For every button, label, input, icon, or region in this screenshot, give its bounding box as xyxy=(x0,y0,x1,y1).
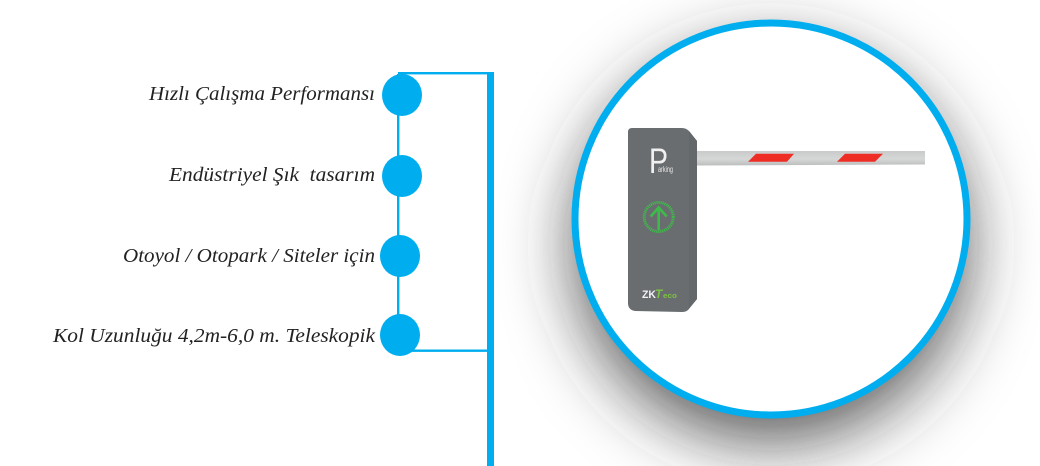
barrier arm xyxy=(697,151,925,166)
ZKTeco logo: eco xyxy=(663,293,677,300)
circle shadow xyxy=(576,50,966,440)
feature 3 xyxy=(123,235,420,277)
ZKTeco logo: ZK xyxy=(642,289,656,301)
ZKTeco logo: T xyxy=(655,287,664,301)
feature 1 xyxy=(148,74,422,116)
feature 4 xyxy=(52,314,420,356)
feature 3: Otoyol / Otopark / Siteler için xyxy=(123,245,375,267)
parking sign: arking xyxy=(658,165,673,174)
feature 2: Endüstriyel Şık tasarım xyxy=(168,164,375,186)
green arrow icon xyxy=(644,202,673,232)
timeline connector xyxy=(397,72,494,466)
feature 2 xyxy=(168,155,422,197)
product circle xyxy=(575,23,967,415)
feature 4: Kol Uzunluğu 4,2m-6,0 m. Teleskopik xyxy=(52,325,376,347)
barrier cabinet xyxy=(628,128,697,312)
parking sign: P xyxy=(649,142,668,181)
ZKTeco logo xyxy=(642,287,677,301)
feature 1: Hızlı Çalışma Performansı xyxy=(148,83,375,105)
